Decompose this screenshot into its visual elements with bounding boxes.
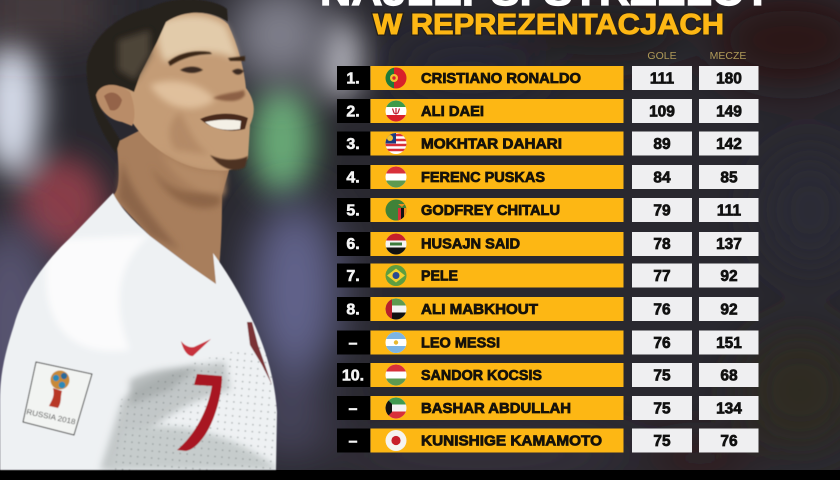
row 3: 142 [716, 136, 742, 153]
row 10: 68 [720, 368, 738, 384]
row 5: 79 [653, 202, 671, 220]
row 3: 3. [346, 136, 360, 153]
row 12 [337, 428, 758, 452]
row 2: ALI DAEI [421, 104, 484, 120]
row 12: – [349, 433, 358, 450]
row 2: 109 [649, 104, 675, 120]
row 12: KUNISHIGE KAMAMOTO [421, 434, 602, 450]
row 9: 151 [716, 335, 742, 352]
portugal crest [247, 322, 272, 385]
row 4 [337, 165, 758, 189]
row 7: 92 [720, 268, 738, 285]
row 8: 8. [346, 302, 360, 318]
row 9: LEO MESSI [421, 336, 500, 352]
hair [87, 0, 228, 153]
ear [96, 85, 134, 126]
row 5: 111 [717, 202, 741, 220]
nike swoosh [181, 339, 211, 356]
row 6: HUSAJN SAID [421, 236, 520, 252]
row 6: 6. [346, 236, 360, 253]
row 1: 1. [346, 70, 360, 88]
row 10 [337, 363, 758, 387]
row 2 [337, 99, 758, 123]
row 12: 76 [720, 433, 738, 450]
row 6 [337, 232, 758, 256]
row 10: SANDOR KOCSIS [421, 368, 542, 384]
row 7: 77 [653, 268, 671, 285]
face [118, 12, 254, 171]
row 5 [337, 198, 758, 222]
smile [200, 114, 248, 131]
neck [112, 110, 232, 290]
title line 2 weight layer: W REPREZENTACJACH [373, 9, 724, 41]
row 11: – [349, 400, 358, 418]
row 4: 4. [346, 170, 360, 186]
row 8: 76 [653, 302, 671, 318]
player photo: Cristiano Ronaldo [0, 0, 285, 475]
row 10: 75 [653, 368, 671, 384]
row 10: 10. [342, 368, 364, 384]
row 5: GODFREY CHITALU [421, 203, 560, 219]
footer black bar [0, 470, 840, 480]
row 2: 2. [346, 104, 360, 120]
row 5: 5. [346, 202, 360, 220]
goatee [210, 155, 248, 170]
row 11: BASHAR ABDULLAH [421, 401, 571, 417]
ranking table [337, 66, 758, 452]
row 6: 78 [653, 236, 671, 253]
column heading: matches: MECZE [710, 50, 746, 62]
row 9: 76 [653, 335, 671, 352]
row 7 [337, 264, 758, 288]
row 1: 111 [650, 70, 674, 88]
row 1: 180 [716, 70, 742, 88]
row 3 [337, 132, 758, 156]
row 9: – [349, 335, 358, 352]
shirt [0, 185, 285, 475]
row 4: FERENC PUSKAS [421, 170, 545, 186]
row 4: 85 [720, 170, 738, 186]
row 4: 84 [653, 170, 671, 186]
row 1: CRISTIANO RONALDO [421, 71, 581, 87]
row 11 [337, 396, 758, 420]
world cup sleeve patch: RUSSIA 2018 [26, 407, 76, 426]
row 6: 137 [716, 236, 742, 253]
title line 2: W REPREZENTACJACH [373, 9, 724, 41]
eyebrows and eyes [168, 51, 245, 66]
row 12: 75 [653, 433, 671, 450]
row 8 [337, 297, 758, 321]
column heading: goals: GOLE [647, 50, 677, 62]
row 7: PELE [421, 268, 458, 284]
row 7: 7. [346, 268, 360, 285]
row 8: ALI MABKHOUT [421, 302, 538, 318]
row 11: 75 [653, 400, 671, 418]
shirt number 7 [177, 374, 222, 451]
row 3: 89 [653, 136, 671, 153]
row 2: 149 [716, 104, 742, 120]
row 9 [337, 330, 758, 354]
nose shadow [213, 90, 245, 101]
row 3: MOKHTAR DAHARI [421, 136, 562, 152]
world cup sleeve patch [23, 362, 92, 435]
row 11: 134 [716, 400, 742, 418]
row 8: 92 [720, 302, 738, 318]
row 1 [337, 66, 758, 90]
title [320, 0, 772, 41]
